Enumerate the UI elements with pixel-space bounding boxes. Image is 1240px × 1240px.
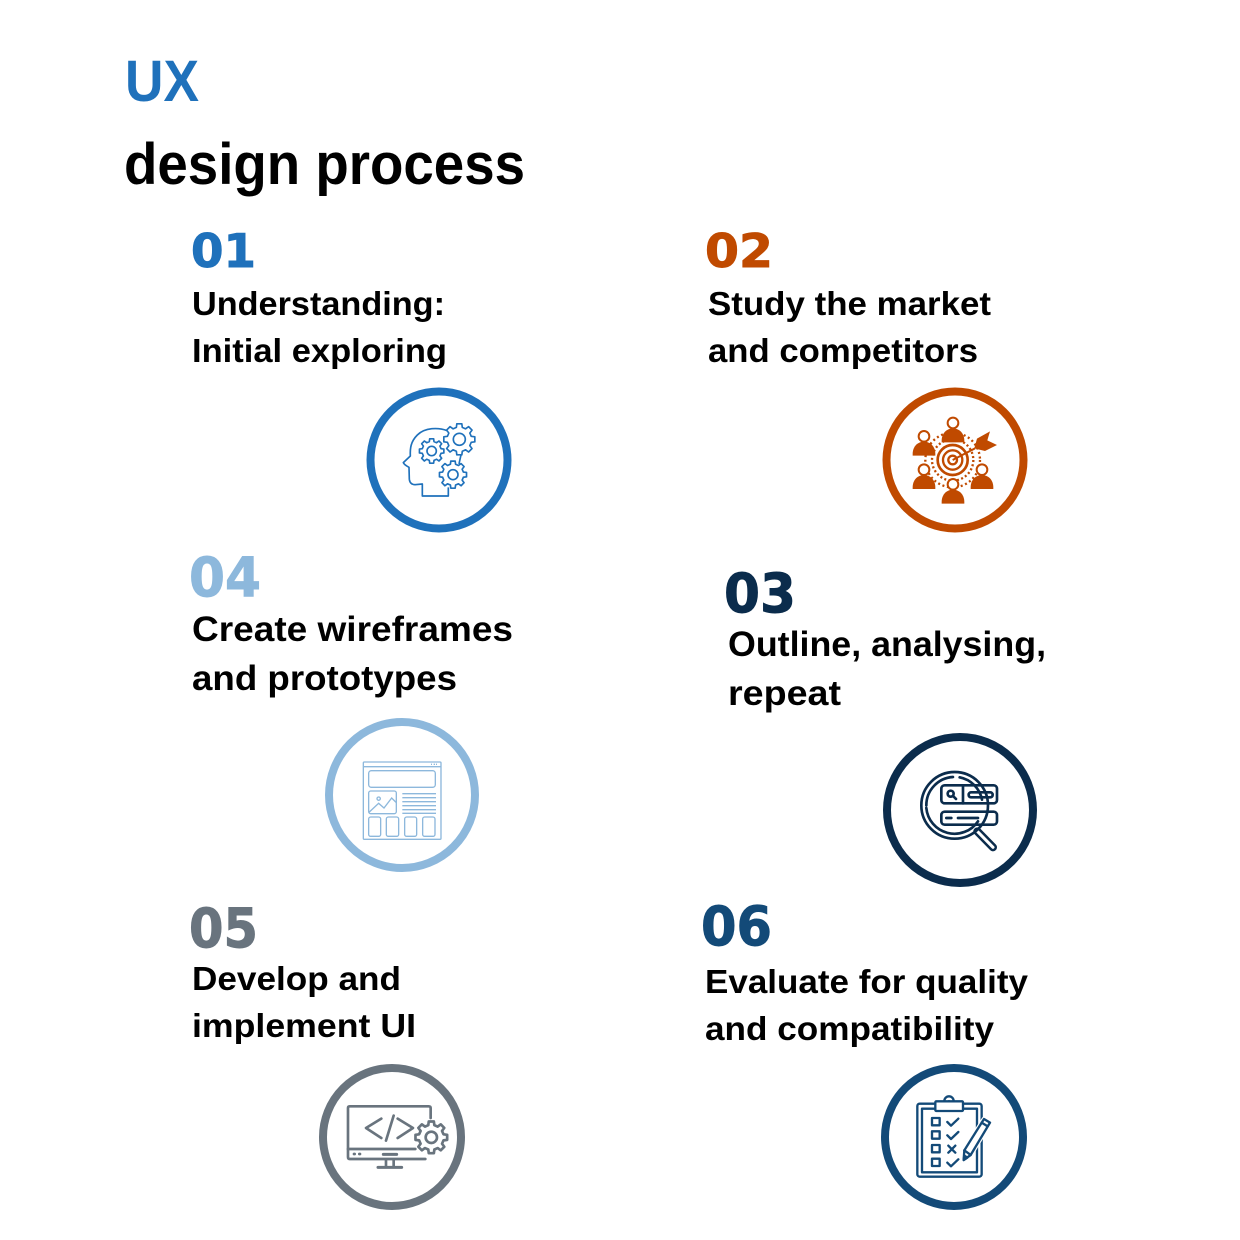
title: design process — [124, 132, 525, 197]
text: step 03 label: Outline, analysing, — [728, 625, 1046, 664]
panel: step 04 — [189, 546, 513, 868]
text: step 02 label: Study the market — [708, 285, 991, 322]
panel: step 06 — [701, 895, 1029, 1206]
text: step 02 label — [708, 285, 991, 369]
text: step 04 label — [192, 610, 513, 698]
text: step 01 label — [192, 285, 447, 369]
icon: target and people — [886, 392, 1024, 528]
panel: step 01 — [191, 224, 508, 528]
icon: magnifier over search bars — [887, 737, 1033, 883]
text: step 03 label — [728, 625, 1046, 713]
title: UX — [125, 49, 199, 114]
text: step 06 label — [705, 963, 1029, 1047]
text: step 02 label: and competitors — [708, 332, 978, 369]
number 04: 04 — [189, 546, 261, 609]
number 02: 02 — [705, 224, 773, 278]
icon: monitor with code and gear — [323, 1068, 461, 1206]
icon: checklist clipboard with pencil — [885, 1068, 1023, 1206]
number 03: 03 — [724, 562, 796, 625]
number 06: 06 — [701, 895, 772, 958]
title — [124, 49, 525, 197]
icon: head with gears — [370, 392, 508, 528]
text: step 05 label — [192, 960, 416, 1044]
text: step 06 label: and compatibility — [705, 1010, 995, 1047]
text: step 04 label: and prototypes — [192, 659, 457, 698]
panel: step 03 — [724, 562, 1046, 883]
panel: step 05 — [189, 897, 461, 1206]
text: step 05 label: Develop and — [192, 960, 401, 997]
text: step 06 label: Evaluate for quality — [705, 963, 1029, 1000]
text: step 05 label: implement UI — [192, 1007, 416, 1044]
text: step 01 label: Initial exploring — [192, 332, 447, 369]
panel: step 02 — [705, 224, 1024, 528]
number 01: 01 — [191, 224, 256, 278]
text: step 01 label: Understanding: — [192, 285, 445, 322]
number 05: 05 — [189, 897, 258, 960]
icon: wireframe — [329, 722, 475, 868]
text: step 03 label: repeat — [728, 674, 841, 713]
text: step 04 label: Create wireframes — [192, 610, 513, 649]
